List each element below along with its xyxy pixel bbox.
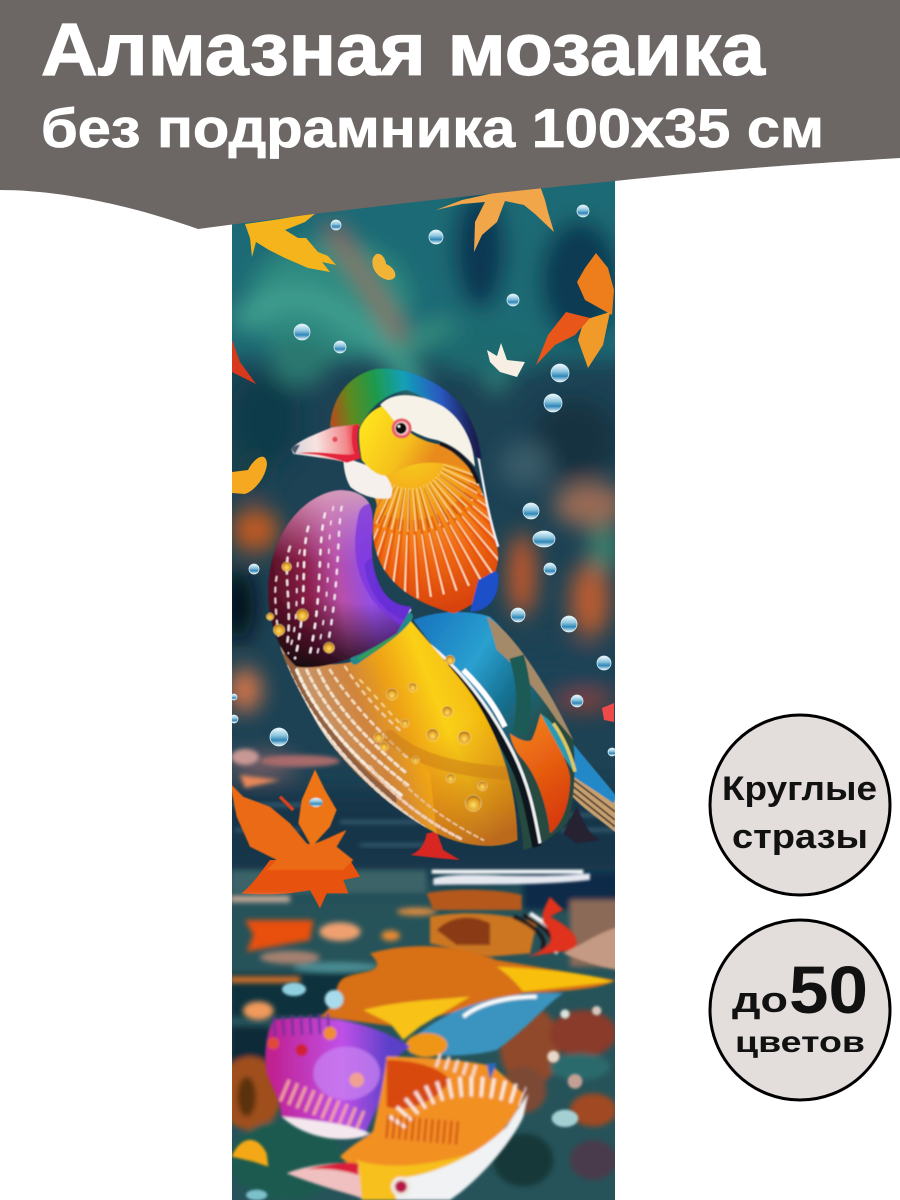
white petal	[487, 343, 525, 377]
belly	[280, 620, 517, 846]
droplets on plumage	[266, 562, 487, 811]
reflected tail and body	[232, 872, 620, 1200]
blurred forest background	[232, 181, 615, 1200]
badge: up to 50 colours: цветов	[735, 1026, 865, 1059]
badge: up to 50 colours: 50	[789, 953, 868, 1028]
white cheek and throat	[343, 457, 392, 499]
foot	[410, 832, 460, 860]
falling maple leaf: yellow	[245, 213, 336, 272]
badge: round rhinestones: Круглые	[722, 770, 877, 808]
neck stripe	[355, 610, 410, 660]
badge: round rhinestones	[710, 715, 890, 895]
butterfly leaf left	[232, 457, 267, 494]
yellow face	[359, 403, 473, 476]
bill	[291, 424, 361, 463]
red petal right edge	[602, 703, 614, 722]
badge: up to 50 colours	[710, 920, 890, 1100]
badge: round rhinestones: стразы	[732, 818, 868, 856]
red leaf left edge	[232, 340, 256, 384]
white eye patch	[380, 395, 475, 467]
lower water base	[232, 882, 615, 1200]
picture panel: mandarin duck on water	[232, 181, 615, 1200]
falling maple leaf: top orange	[436, 186, 554, 252]
small yellow petal	[372, 254, 395, 280]
falling maple leaf: right orange	[536, 253, 614, 368]
water bubbles	[230, 205, 616, 756]
water surface	[200, 790, 650, 875]
neck back stripes	[478, 457, 498, 547]
tail	[563, 740, 617, 843]
eye	[392, 418, 412, 438]
reflected leaf	[242, 860, 360, 908]
crest	[330, 368, 482, 460]
subtitle: без подрамника 100х35 см	[41, 97, 824, 159]
title: Алмазная мозаика	[41, 8, 766, 91]
reflection in the water	[218, 860, 620, 1200]
orange leaf in the water	[230, 769, 353, 870]
breast	[263, 490, 417, 673]
water surface streaks	[232, 805, 615, 845]
blurred lights	[231, 749, 340, 788]
mandarin duck	[230, 340, 617, 870]
wing	[413, 612, 575, 850]
badge: up to 50 colours: до	[732, 979, 788, 1020]
neck ruff feathers	[372, 462, 500, 614]
header banner	[0, 0, 900, 229]
